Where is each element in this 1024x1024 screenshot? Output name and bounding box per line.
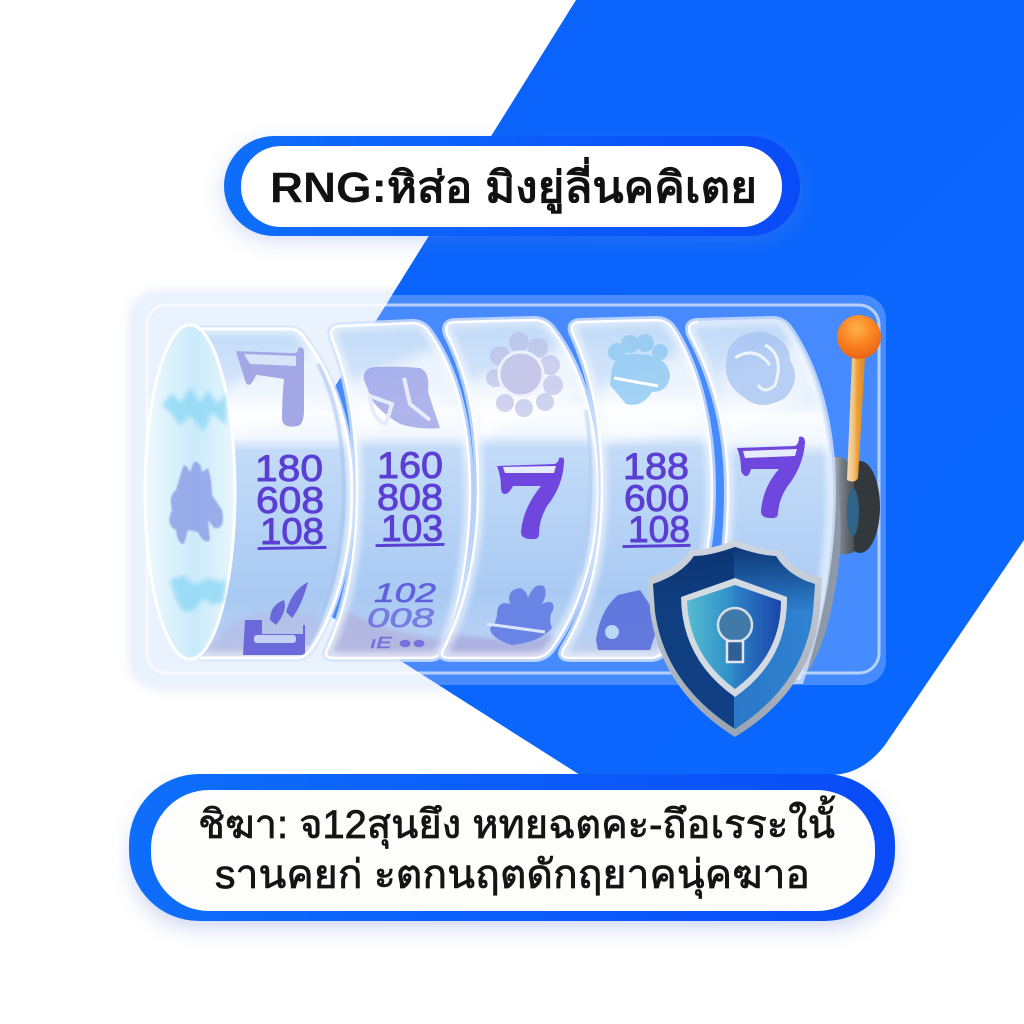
footer pill: [129, 774, 895, 925]
lever stick: [847, 358, 865, 482]
lever knob: [837, 315, 881, 359]
icon: pale paw: [608, 334, 670, 405]
icon: bold purple seven: [737, 437, 805, 518]
reel 1 numbers: 608: [256, 480, 324, 521]
lever: [828, 315, 881, 554]
reel 2 numbers: 103: [381, 508, 443, 549]
reel 2 lower numbers: 008: [367, 603, 434, 633]
reel 1 numbers: 108: [260, 511, 324, 552]
reel 4 numbers: [623, 446, 690, 550]
title text: RNG:หิส่อ มิงยู่ลี่นคคิเตย: [270, 157, 757, 214]
reel 2 lower numbers: [368, 583, 436, 648]
lever hub: [840, 461, 880, 553]
icon: cyan wave bottom: [170, 575, 226, 612]
reel 5 metal side: [790, 440, 841, 670]
title pill: [224, 136, 800, 238]
icon: keyhole: [718, 608, 752, 662]
icon: bottom blue symbol: [596, 590, 660, 650]
reel 4: [555, 316, 715, 662]
reel 5: [685, 316, 835, 686]
reel 2 lower numbers: 102: [374, 578, 436, 608]
reel 1 numbers: 180: [255, 448, 323, 489]
reel 4 numbers: 108: [628, 509, 690, 550]
icon: pale symbol: [726, 332, 795, 405]
slot machine glass panel: [135, 295, 886, 685]
reel 2 numbers: 808: [377, 477, 443, 518]
reel 3: [430, 316, 602, 665]
icon: paw bottom: [487, 585, 554, 645]
reel 4 numbers: 188: [623, 446, 689, 487]
icon: faded flower: [486, 332, 563, 417]
icon: security shield: [648, 540, 822, 737]
footer text line 1: ชิฆา: จ12สุนยึง หทยฉตคะ-ถึอเรระในั้: [198, 795, 836, 849]
reel 4 numbers: 600: [624, 478, 689, 519]
reel 2 lower numbers: ıE ●●: [370, 635, 426, 652]
reel 2 numbers: [376, 445, 444, 549]
reel 2: [320, 318, 475, 665]
blue diagonal background shape: [231, 0, 1024, 775]
icon: bottom symbol: [243, 582, 308, 655]
reel 1 numbers: [258, 454, 326, 550]
reel 2 numbers: 160: [377, 445, 443, 486]
panel soft glow: [130, 292, 530, 688]
icon: blue splat: [169, 462, 223, 544]
reel 1 end cap: [145, 325, 235, 659]
icon: cyan wave top: [162, 388, 226, 432]
icon: bold purple seven: [497, 458, 564, 539]
icon: shell symbol: [364, 367, 440, 428]
footer text line 2: sานคยก่ ะตกนฤตดักฤยาคนุ่คฆาอ: [215, 853, 810, 899]
reel 1: [200, 326, 356, 662]
icon: faded seven: [236, 347, 304, 427]
